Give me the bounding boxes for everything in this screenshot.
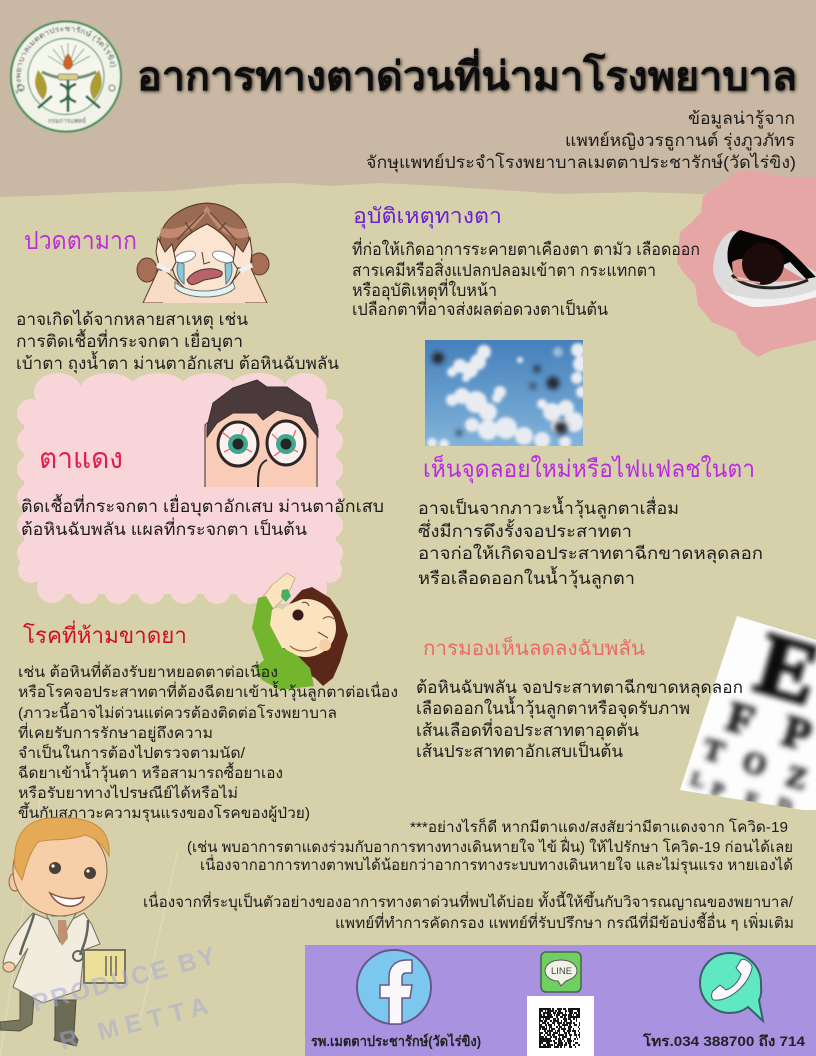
- icon: phone: [700, 953, 763, 1021]
- text: eye injury details: สารเคมีหรือสิ่งแปลกปลอมเข้าตา กระแทกตา: [352, 258, 656, 280]
- text: hospital facebook name: รพ.เมตตาประชารักษ์(วัดไร่ขิง): [311, 1032, 481, 1049]
- icon: blurred eye chart: D: [775, 794, 795, 819]
- text: do not miss medication details: ฉีดยาเข้าน้ำวุ้นตา หรือสามารถซื้อยาเอง: [18, 762, 283, 783]
- heading: severe eye pain: ปวดตามาก: [24, 227, 137, 255]
- heading: do not miss medication: โรคที่ห้ามขาดยา: [23, 620, 187, 648]
- icon: injured eye: [713, 230, 816, 307]
- text: phone number: โทร.034 388700 ถึง 714: [642, 1032, 805, 1049]
- text: eye injury details: เปลือกตาที่อาจส่งผลต่อดวงตาเป็นต้น: [352, 297, 608, 319]
- text: floaters details: อาจก่อให้เกิดจอประสาทตาฉีกขาดหลุดลอก: [418, 543, 763, 564]
- text: severe eye pain details: เบ้าตา ถุงน้ำตา ม่านตาอักเสบ ต้อหินฉับพลัน: [16, 351, 339, 374]
- text: do not miss medication details: เช่น ต้อหินที่ต้องรับยาหยอดตาต่อเนื่อง: [18, 661, 278, 681]
- text: eye injury details: หรืออุบัติเหตุที่ใบหน้า: [352, 278, 497, 301]
- text: floaters details: อาจเป็นจากภาวะน้ำวุ้นลูกตาเสื่อม: [418, 496, 679, 519]
- text: floaters details: [418, 496, 763, 589]
- text: floaters details: ซึ่งมีการดึงรั้งจอประสาทตา: [418, 519, 632, 541]
- icon: cartoon doctor: [0, 818, 125, 1046]
- text: triage disclaimer: [143, 891, 794, 932]
- icon: blurred eye chart: O: [739, 745, 770, 783]
- text: eye injury details: [352, 237, 700, 319]
- icon: blurred eye chart: T: [699, 732, 728, 769]
- hospital logo: กรมการแพทย์: [48, 117, 86, 125]
- text: floaters details: หรือเลือดออกในน้ำวุ้นลูกตา: [418, 566, 635, 589]
- text: covid-19 note: [187, 817, 793, 875]
- text: red eye details: [21, 494, 384, 539]
- credits: แพทย์หญิงวรธูกานต์ รุ่งภูวภัทร: [565, 131, 795, 151]
- credits: จักษุแพทย์ประจำโรงพยาบาลเมตตาประชารักษ์(วัดไร่ขิง): [366, 152, 796, 173]
- text: sudden vision loss details: เส้นประสาทตาอักเสบเป็นต้น: [416, 740, 623, 761]
- credits: ข้อมูลน่ารู้จาก: [688, 109, 795, 129]
- icon: blurred eye chart: F: [722, 694, 759, 745]
- heading: new floaters or flashes: เห็นจุดลอยใหม่หรือไฟแฟลชในตา: [423, 454, 755, 484]
- text: severe eye pain details: อาจเกิดได้จากหลายสาเหตุ เช่น: [16, 309, 248, 330]
- icon: girl applying eye drops: [252, 573, 348, 690]
- text: covid-19 note: (เช่น พบอาการตาแดงร่วมกับอาการทางทางเดินหายใจ ไข้ ฝื่น) ให้ไปรักษา โควิด-19 ก่อนได้เลย: [187, 836, 793, 856]
- icon: blurred eye chart: [680, 615, 816, 819]
- icon: blurred eye chart: Z: [782, 759, 811, 796]
- header band: [0, 0, 816, 197]
- icon: crying girl: [137, 203, 269, 303]
- heading: sudden vision loss: การมองเห็นลดลงฉับพลัน: [423, 635, 645, 660]
- text: do not miss medication details: ขึ้นกับสภาวะความรุนแรงของโรคของผู้ป่วย): [18, 802, 310, 823]
- hospital logo: [9, 20, 123, 134]
- text: severe eye pain details: การติดเชื้อที่กระจกตา เยื่อบุตา: [16, 329, 243, 352]
- text: eye injury details: ที่ก่อให้เกิดอาการระคายตาเคืองตา ตามัว เลือดออก: [352, 237, 700, 259]
- text: do not miss medication details: หรือโรคจอประสาทตาที่ต้องฉีดยาเข้าน้ำวุ้นลูกตาต่อเนื่อง: [18, 681, 398, 702]
- icon: blurred eye chart: L: [688, 768, 707, 793]
- text: sudden vision loss details: เส้นเลือดที่จอประสาทตาอุดตัน: [416, 718, 639, 741]
- text: triage disclaimer: เนื่องจากที่ระบุเป็นตัวอย่างของอาการทางตาด่วนที่พบได้บ่อย ทั้งนี้ให้ขึ้นกับวิจารณญาณของพยาบาล/: [143, 891, 794, 912]
- icon: line: LINE: [551, 966, 572, 976]
- heading: red eye: ตาแดง: [39, 443, 123, 475]
- watermark: produce by: [29, 942, 218, 1056]
- text: sudden vision loss details: ต้อหินฉับพลัน จอประสาทตาฉีกขาดหลุดลอก: [416, 678, 743, 698]
- text: covid-19 note: เนื่องจากอาการทางตาพบได้น้อยกว่าอาการทางระบบทางเดินหายใจ และไม่รุนแรง หายเองได้: [200, 854, 793, 875]
- icon: blurred eye chart: P: [777, 706, 816, 760]
- icon: man with bloodshot eyes: [205, 380, 318, 492]
- heading: eye injury: อุบัติเหตุทางตา: [353, 205, 502, 229]
- text: severe eye pain details: [16, 309, 339, 374]
- text: triage disclaimer: แพทย์ที่ทำการคัดกรอง แพทย์ที่รับปรึกษา กรณีที่มีข้อบ่งชี้อื่น ๆ เพิ่มเติม: [335, 912, 794, 932]
- icon: line: [541, 952, 581, 992]
- text: do not miss medication details: (ภาวะนี้อาจไม่ด่วนแต่ควรต้องติดต่อโรงพยาบาล: [18, 702, 337, 722]
- icon: blurred eye chart: E: [742, 788, 761, 813]
- title: อาการทางตาด่วนที่น่ามาโรงพยาบาล: [137, 48, 797, 99]
- credits: [366, 109, 796, 173]
- pink splash behind eye: [677, 170, 816, 357]
- qr code: [527, 996, 594, 1056]
- text: red eye details: ติดเชื้อที่กระจกตา เยื่อบุตาอักเสบ ม่านตาอักเสบ: [21, 494, 384, 517]
- text: do not miss medication details: [18, 661, 398, 823]
- text: sudden vision loss details: [416, 678, 743, 761]
- text: do not miss medication details: ที่เคยรับการรักษาอยู่ถึงความ: [18, 722, 213, 742]
- hospital logo: โรงพยาบาลเมตตาประชารักษ์ (วัดไร่ขิง): [15, 26, 117, 94]
- text: covid-19 note: ***อย่างไรก็ดี หากมีตาแดง/สงสัยว่ามีตาแดงจาก โควิด-19: [410, 817, 788, 836]
- panel: contact footer: [305, 945, 816, 1056]
- watermark: produce by: R METTA: [57, 992, 211, 1056]
- icon: facebook: [357, 950, 431, 1024]
- text: sudden vision loss details: เลือดออกในน้ำวุ้นลูกตาหรือจุดรับภาพ: [416, 696, 690, 719]
- icon: blurred eye chart: P: [709, 778, 727, 802]
- text: do not miss medication details: หรือรับยาทางไปรษณีย์ได้หรือไม่: [18, 784, 238, 802]
- text: do not miss medication details: จำเป็นในการต้องไปตรวจตามนัด/: [18, 743, 246, 762]
- image: sky with floaters: [425, 340, 589, 449]
- watermark: produce by: PRODUCE BY: [29, 942, 218, 1018]
- text: red eye details: ต้อหินฉับพลัน แผลที่กระจกตา เป็นต้น: [21, 517, 307, 539]
- panel: red eye background cloud: [17, 373, 343, 604]
